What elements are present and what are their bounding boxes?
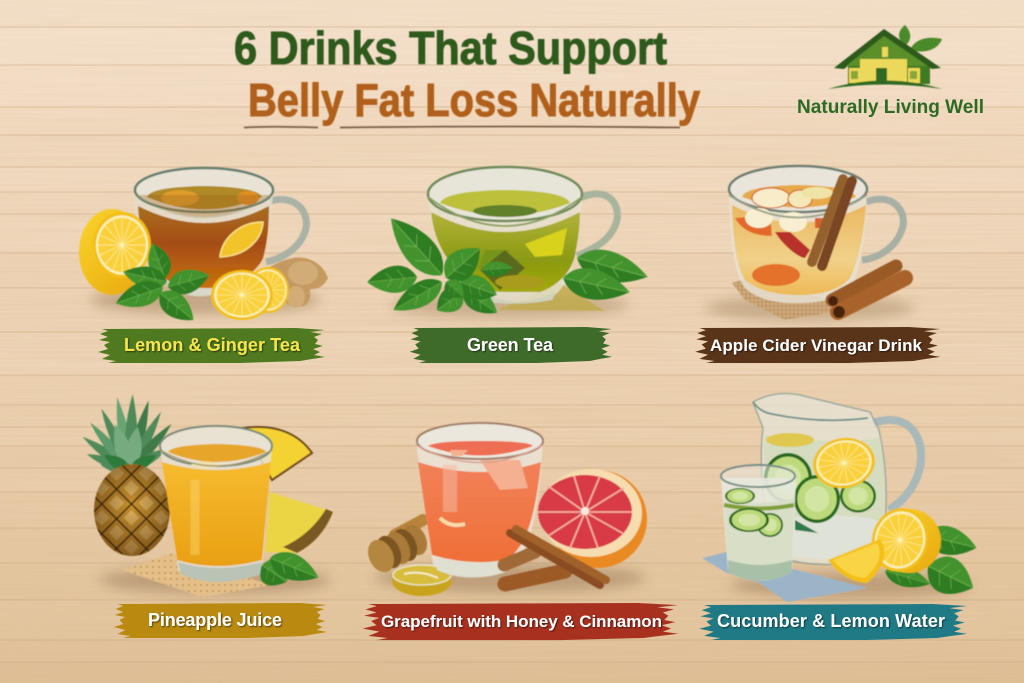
icon: cup handle [862, 199, 903, 260]
icon: woven mat [122, 553, 270, 597]
icon: tea cup handle [266, 199, 306, 262]
icon: whole pineapple [80, 394, 175, 556]
icon: pitcher handle [873, 420, 921, 510]
label: Green Tea [410, 327, 612, 363]
title: Belly Fat Loss Naturally [248, 74, 700, 126]
icon: juice glass [160, 426, 272, 582]
icon: green tea cup [428, 167, 582, 304]
drink: pineapple juice [80, 394, 333, 597]
title [234, 22, 700, 128]
icon: lemon half [79, 209, 151, 295]
drink: apple cider vinegar [705, 166, 915, 321]
icon: tea reflection on table [497, 283, 605, 311]
icon: cinnamon sticks on table [828, 266, 905, 318]
label: Cucumber & Lemon Water [699, 604, 967, 640]
icon: cider glass mug [729, 166, 867, 303]
icon: pineapple wedges [243, 427, 333, 553]
icon: mint leaves right [560, 243, 651, 307]
logo: Naturally Living Well [797, 25, 984, 118]
icon: drinking glass [721, 465, 796, 581]
icon: blue cloth [702, 552, 867, 602]
label: Apple Cider Vinegar Drink: Apple Cider Vinegar Drink [710, 336, 923, 355]
icon: glass pitcher [753, 394, 886, 564]
icon: honey dipper [363, 520, 432, 576]
drink: green tea [366, 167, 651, 322]
title: 6 Drinks That Support [234, 22, 667, 74]
icon: cinnamon sticks in drink [812, 179, 852, 266]
label: Pineapple Juice: Pineapple Juice [148, 610, 282, 630]
icon: mint leaves [112, 240, 213, 329]
icon: grapefruit half [538, 469, 647, 568]
logo: Naturally Living Well: Naturally Living Well [797, 97, 984, 118]
icon: lemon half [865, 502, 941, 578]
label: Lemon & Ginger Tea [98, 328, 325, 363]
icon: juice glass [416, 423, 543, 577]
drink: grapefruit honey cinnamon [363, 423, 647, 596]
label: Grapefruit with Honey & Cinnamon: Grapefruit with Honey & Cinnamon [381, 612, 662, 631]
icon: burlap coaster [732, 278, 832, 320]
icon: lemon leaves [882, 521, 981, 605]
icon: mint leaves left [366, 208, 513, 322]
drink: cucumber and lemon water [702, 394, 981, 605]
icon: tea cup [134, 168, 273, 296]
icon: lemon slices [211, 267, 289, 320]
icon: cup handle [577, 194, 617, 256]
label: Apple Cider Vinegar Drink [695, 327, 940, 363]
label: Cucumber & Lemon Water: Cucumber & Lemon Water [717, 611, 945, 631]
icon: ginger root [268, 257, 328, 308]
label: Green Tea: Green Tea [467, 335, 554, 355]
label: Pineapple Juice [114, 603, 327, 638]
label: Lemon & Ginger Tea: Lemon & Ginger Tea [124, 335, 301, 355]
drink: lemon and ginger tea [79, 168, 328, 329]
icon: cinnamon sticks [504, 529, 606, 585]
label: Grapefruit with Honey & Cinnamon [363, 603, 678, 640]
icon: mint [254, 546, 323, 593]
icon: honey bowl [392, 565, 452, 596]
icon: lemon wedge [828, 539, 884, 583]
